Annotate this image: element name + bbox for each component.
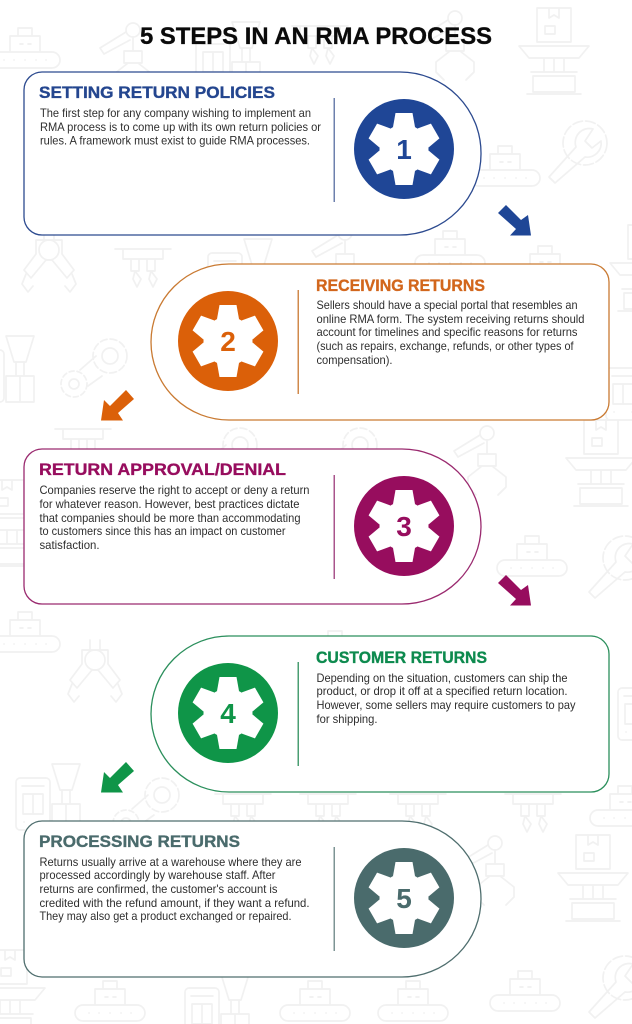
divider [334,98,335,202]
body text [40,106,321,148]
body text [316,298,584,367]
heading: PROCESSING RETURNS [39,832,240,851]
arrow: step 1 to step 2 [498,205,531,236]
icon: gear 3: 3 [396,511,412,542]
arrow: step 4 to step 5 [101,762,134,792]
body text: account for timelines and specific reasons for returns [316,325,578,339]
body text: (such as repairs, exchange, refunds, or other types of [316,339,574,353]
panel: step 3 return approval/denial [24,449,481,604]
body text: for shipping. [316,712,378,726]
divider [298,290,299,394]
body text: However, some sellers may require customers to pay [316,698,576,712]
icon: gear 5: 5 [396,883,412,914]
body text: credited with the refund amount, if they want a refund. [40,896,310,910]
arrow: step 3 to step 4 [498,575,531,606]
icon: gear 5 [354,848,454,948]
icon: gear 1 [354,99,454,199]
heading: RETURN APPROVAL/DENIAL [39,460,286,479]
body text: RMA process is to come up with its own return policies or [40,120,321,134]
icon: gear 3 [354,476,454,576]
icon: gear 2 [178,291,278,391]
body text [316,671,576,726]
body text: product, or drop it off at a specified return location. [316,684,568,698]
divider [298,662,299,766]
body text: rules. A framework must exist to guide RMA processes. [40,134,310,148]
card outline [151,636,609,792]
body text: processed accordingly by warehouse staff. After [40,868,276,882]
body text: Sellers should have a special portal that resembles an [316,298,578,312]
body text: satisfaction. [40,538,100,552]
panel: step 2 receiving returns [151,264,609,420]
divider [334,475,335,579]
heading: RECEIVING RETURNS [316,276,485,295]
card outline [24,821,481,977]
divider [334,847,335,951]
body text: returns are confirmed, the customer's account is [40,882,278,896]
body text: for whatever reason. However, best practices dictate [40,497,300,511]
title: 5 STEPS IN AN RMA PROCESS [140,23,492,50]
icon: gear 4 [178,663,278,763]
heading: CUSTOMER RETURNS [316,648,487,667]
body text: The first step for any company wishing to implement an [40,106,311,120]
body text [40,855,310,923]
body text: They may also get a product exchanged or repaired. [40,909,292,923]
card outline [24,72,481,235]
card outline [24,449,481,604]
icon: gear 1: 1 [396,134,412,165]
panel: step 5 processing returns [24,821,481,977]
heading: SETTING RETURN POLICIES [39,83,275,102]
body text: Companies reserve the right to accept or deny a return [40,483,310,497]
panel: step 1 setting return policies [24,72,481,235]
body text: to customers since this has an impact on customer [40,524,286,538]
panel: step 4 customer returns [151,636,609,792]
body text: online RMA form. The system receiving returns should [316,312,584,326]
icon: gear 2: 2 [220,326,236,357]
icon: gear 4: 4 [220,698,236,729]
body text: Depending on the situation, customers can ship the [316,671,568,685]
body text: Returns usually arrive at a warehouse where they are [40,855,302,869]
body text: that companies should be more than accommodating [40,511,300,525]
arrow: step 2 to step 3 [101,390,134,420]
card outline [151,264,609,420]
body text: compensation). [316,353,392,367]
body text [40,483,310,552]
